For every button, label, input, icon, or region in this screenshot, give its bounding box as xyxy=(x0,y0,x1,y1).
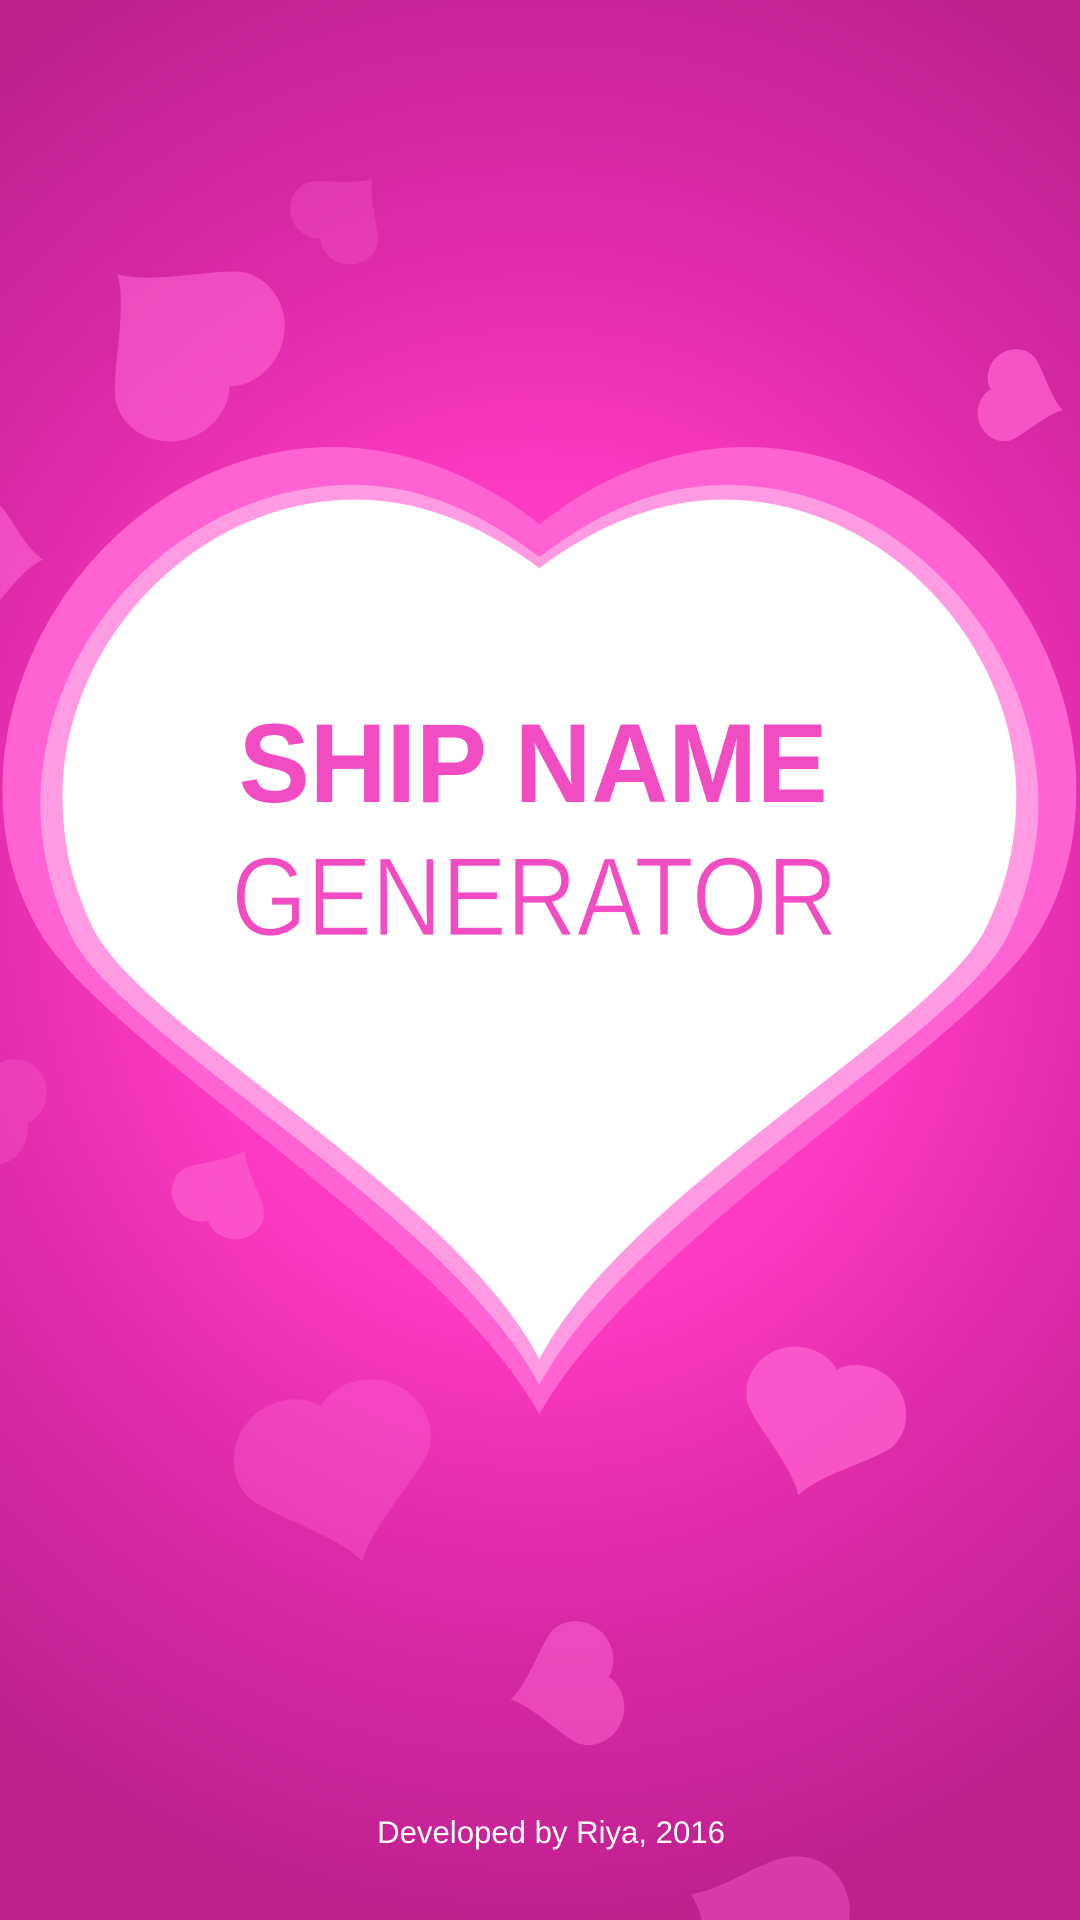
icon: large heart bottom left xyxy=(220,1366,459,1587)
title: generator: GENERATOR xyxy=(231,834,838,960)
icon: heart bottom centre xyxy=(497,1614,632,1761)
icon: heart cut off at bottom edge xyxy=(691,1856,850,1920)
title: ship name: SHIP NAME xyxy=(239,700,828,826)
main heart xyxy=(2,447,1076,1414)
icon: heart cut off at left edge, lower xyxy=(0,1059,47,1164)
heart: outer layer xyxy=(2,447,1076,1414)
icon: small heart top right xyxy=(971,342,1076,455)
icon: large heart top left xyxy=(48,205,309,466)
icon: heart bottom right xyxy=(720,1334,918,1519)
footer credit: Developed by Riya, 2016 xyxy=(377,1814,725,1850)
heart: middle layer xyxy=(40,485,1038,1385)
heart: white centre xyxy=(62,500,1016,1359)
icon: small heart lower left xyxy=(161,1128,288,1250)
icon: small heart top xyxy=(278,146,410,277)
icon: heart cut off at left edge, upper xyxy=(0,506,43,600)
